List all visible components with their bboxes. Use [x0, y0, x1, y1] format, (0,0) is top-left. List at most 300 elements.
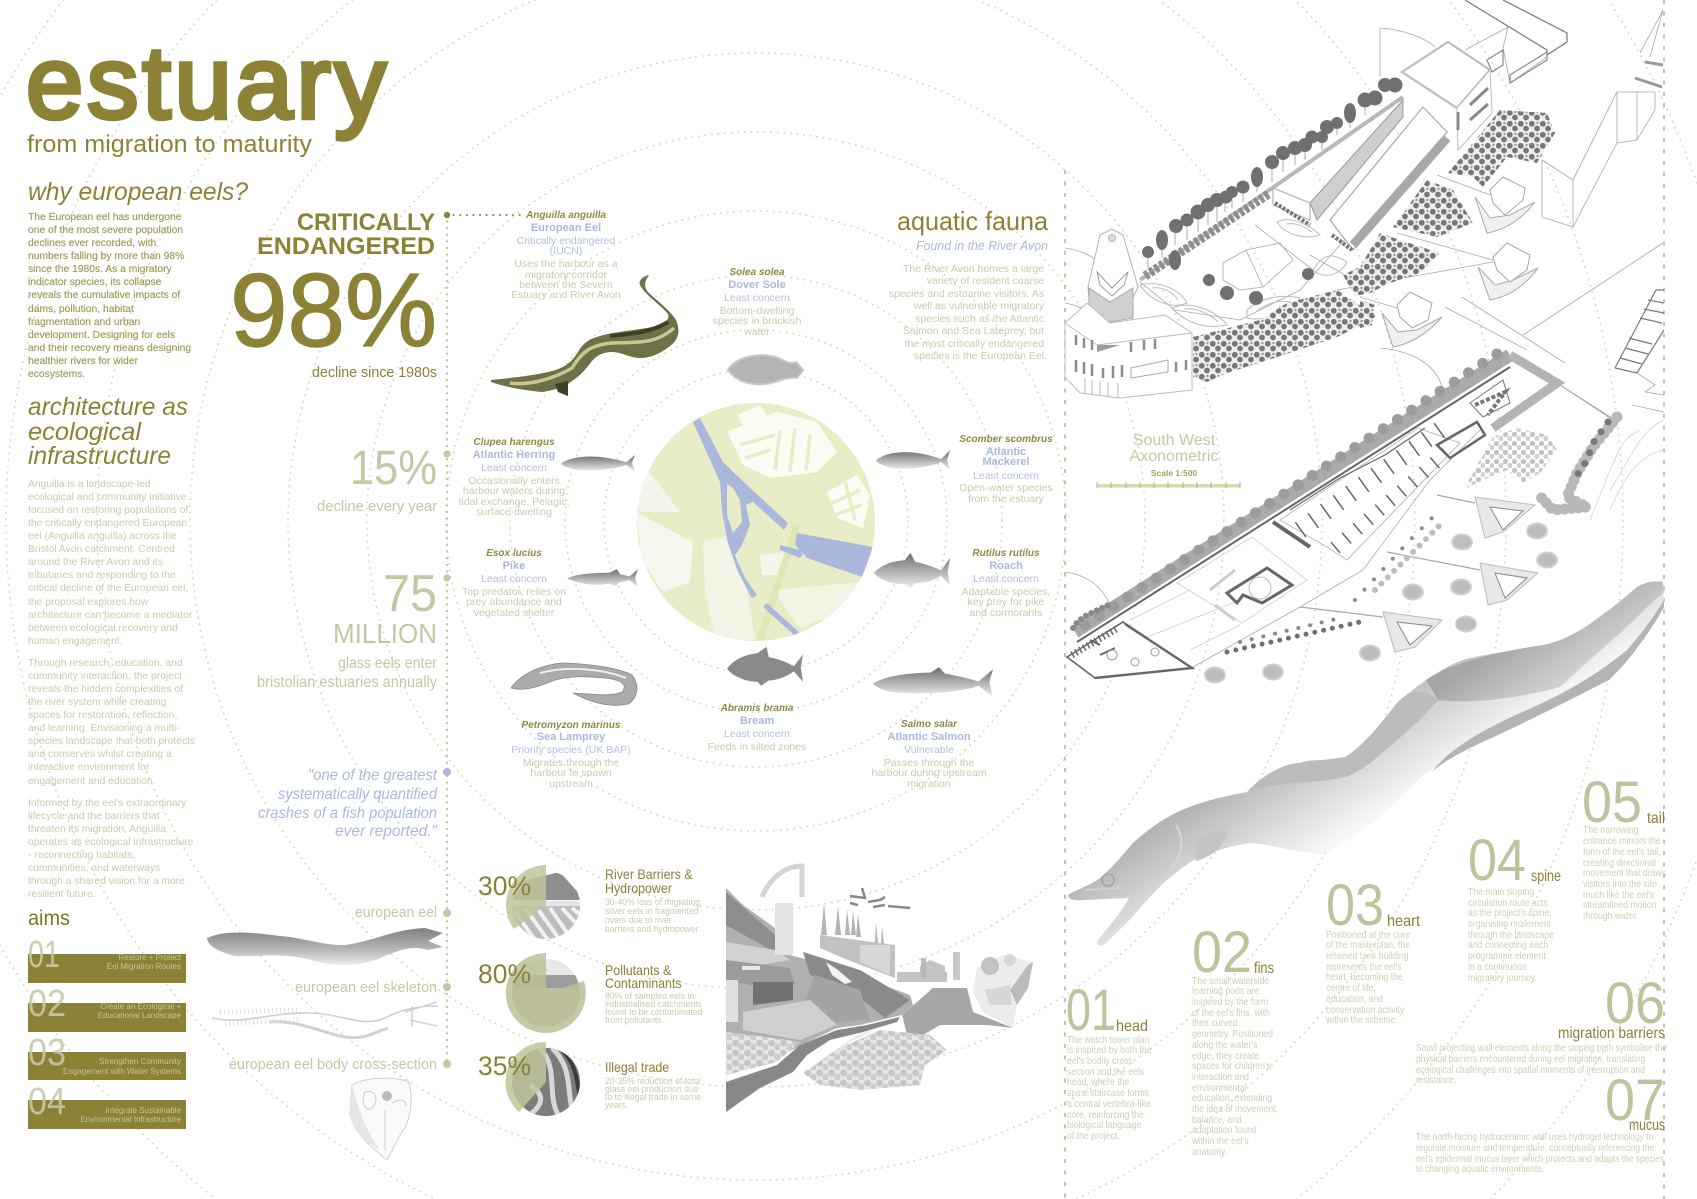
heading: architecture as ecological infrastructure: infrastructure [28, 442, 171, 470]
aim bar 01: Eel Migration Routes [107, 962, 181, 971]
panel: aquatic fauna heading: aquatic fauna [897, 206, 1049, 236]
illustration: sea lamprey [511, 663, 637, 705]
text: why european eels: declines ever recorded, with [28, 238, 156, 249]
annotation 01 head: The watch tower plan [1067, 1034, 1150, 1045]
timeline dots [443, 212, 451, 1068]
text: architecture description: operates as ecological infrastructure [28, 837, 194, 848]
label: european eel skeleton: european eel skeleton [295, 979, 437, 996]
threat: illegal trade [478, 1042, 701, 1118]
annotation 05 tail: 05 [1582, 770, 1642, 835]
annotation 07 mucus: mucus [1629, 1117, 1665, 1134]
yard at spine end [1470, 355, 1557, 428]
text: dover sole: Dover Sole [728, 279, 786, 291]
text: roach: Rutilus rutilus [972, 548, 1040, 559]
panel: aquatic fauna heading: species and estuarine visitors. As [889, 288, 1044, 300]
text: why european eels: The European eel has undergone [28, 212, 182, 223]
threat: river barriers [478, 865, 700, 940]
text: dover sole: Bottom-dwelling [720, 305, 795, 317]
annotation 04 spine: migratory journey. [1468, 972, 1537, 983]
annotation 05 tail: much like the eel's [1583, 889, 1654, 900]
species: dover sole [713, 267, 803, 384]
text: pollutants [605, 963, 702, 1025]
text: sea lamprey: Migrates through the [523, 757, 619, 769]
pie 35% [478, 1042, 585, 1118]
aim bar 04: 04 [28, 1081, 66, 1123]
subtitle: from migration to maturity [27, 131, 312, 158]
stat: 15%: 15% [350, 442, 437, 495]
aim bar 04 [28, 1081, 186, 1129]
text: why european eels: reveals the cumulative impacts of [28, 290, 180, 301]
text: architecture description: threaten its migration, Anguilla [28, 824, 166, 835]
steps [1615, 290, 1664, 412]
aim bar 01 [28, 934, 186, 983]
panel: aquatic fauna heading [889, 206, 1049, 362]
text: architecture description: Through research, education, and [28, 658, 183, 669]
stat: 75 million: glass eels enter [338, 655, 438, 672]
text: architecture description: resilient future. [28, 889, 96, 900]
annotation 03 heart: heart [1387, 913, 1421, 930]
annotation 05 tail: creating directional [1583, 857, 1656, 868]
annotation 02 fins [1191, 920, 1278, 1157]
text: salmon: harbour during upstream [872, 767, 987, 779]
text: roach: and cormorants [970, 607, 1042, 619]
text: herring: tidal exchange. Pelagic, [459, 496, 569, 508]
text: architecture description: Anguilla is a landscape-led [28, 479, 151, 490]
text: river barriers: 30-40% loss of migrating [605, 897, 700, 907]
scale bar [1097, 482, 1240, 488]
text: illegal trade: years. [605, 1100, 629, 1110]
text: european eel: Estuary and River Avon [511, 289, 621, 301]
text: pike: Pike [503, 560, 525, 572]
text: pollutants: Pollutants & [605, 963, 672, 978]
annotation 03 heart: 03 [1326, 873, 1384, 938]
text: european eel: Critically endangered [517, 235, 615, 247]
text: river barriers: silver eels in fragmented [605, 906, 699, 916]
text: architecture description: species landscape that both protects [28, 736, 195, 747]
text: sea lamprey: harbour to spawn [530, 767, 612, 779]
annotation 03 heart: of the masterplan, the [1326, 939, 1410, 950]
text: why european eels: indicator species, its collapse [28, 277, 162, 288]
text: european eel: Anguilla anguilla [525, 210, 606, 221]
quote: "one of the greatest [308, 767, 438, 784]
text: architecture description: engagement and education. [28, 776, 156, 787]
text: pollutants: from pollutants. [605, 1015, 664, 1025]
text: illegal trade [605, 1060, 701, 1110]
text: river barriers: River Barriers & [605, 867, 693, 882]
caption: south west axonometric [1097, 432, 1240, 488]
text: mackerel: Mackerel [982, 456, 1030, 468]
tower base building [1065, 303, 1192, 398]
text: roach [962, 548, 1050, 619]
drawing: european eel [207, 928, 443, 965]
aim bar 04: Integrate Sustainable [105, 1106, 182, 1115]
caption: south west axonometric: Scale 1:500 [1151, 468, 1197, 478]
annotation 02 fins: their curved [1192, 1017, 1237, 1028]
text: why european eels: ecosystems. [28, 369, 85, 380]
text: architecture description: critical decline of the European eel, [28, 583, 188, 594]
text: herring: Atlantic Herring [473, 449, 555, 461]
panel: aquatic fauna heading: Found in the River Avon [916, 238, 1048, 253]
annotation 04 spine: programme element [1468, 950, 1546, 961]
annotation 01 head: is inspired by both the [1067, 1044, 1152, 1055]
annotation 05 tail: tail [1647, 810, 1665, 827]
annotation 05 tail: movement that draws [1583, 867, 1666, 878]
planting circles [1205, 524, 1557, 682]
annotation 02 fins: adaptation found [1192, 1124, 1257, 1135]
stat: critically endangered [230, 209, 437, 381]
text: european eel: between the Severn [519, 279, 613, 291]
text: architecture description: focused on restoring populations of [28, 505, 188, 516]
text: why european eels: since the 1980s. As a migratory [28, 264, 173, 275]
text: salmon: Salmo salar [901, 719, 958, 730]
text: mackerel: Atlantic [986, 446, 1026, 458]
species: european eel [491, 210, 678, 396]
text: pike [462, 548, 566, 619]
annotation 01 head: 01 [1066, 978, 1116, 1043]
text: illegal trade: glass eel production due [605, 1084, 699, 1094]
annotation 03 heart: within the scheme. [1325, 1014, 1398, 1025]
annotation 03 heart: conservation activity [1326, 1004, 1405, 1015]
annotation 02 fins: 02 [1192, 920, 1252, 985]
text: why european eels: dams, pollution, habitat [28, 304, 134, 315]
quote: crashes of a fish population [258, 805, 437, 822]
text: architecture description: community interaction, the project [28, 671, 182, 682]
text: illegal trade: 20-35% reduction of total [605, 1076, 701, 1086]
annotation 04 spine: spine [1531, 868, 1561, 885]
stat: 75 million: MILLION [333, 618, 437, 649]
annotation 02 fins: within the eel's [1191, 1135, 1249, 1146]
text: salmon: migration [907, 778, 951, 790]
aim bar 04: Environmental Infrastructure [80, 1115, 182, 1124]
text: european eel: migratory corridor [525, 269, 608, 281]
text: sea lamprey [511, 720, 631, 790]
stat: critically endangered: ENDANGERED [257, 233, 435, 260]
annotation 02 fins: the idea of movement, [1192, 1103, 1278, 1114]
tree masses [1193, 110, 1555, 382]
annotation 04 spine: as the project's spine, [1468, 907, 1552, 918]
text: architecture description: between ecological recovery and [28, 623, 178, 634]
dotted vertical guides [447, 0, 1664, 1199]
drawing: eel skeleton [212, 1002, 438, 1038]
text: architecture description: - reconnecting habitats, [28, 850, 135, 861]
text: pike: Top predator, relies on [462, 586, 566, 598]
text: why european eels: development. Designing for eels [28, 330, 175, 341]
stat: critically endangered: CRITICALLY [297, 209, 435, 236]
annotation 06 migration barriers: Small projecting wall elements along the sloping path symbolise the [1416, 1042, 1667, 1053]
text: sea lamprey: upstream [549, 778, 593, 790]
text: why european eels: healthier rivers for wider [28, 356, 138, 367]
text: architecture description: and learning. Envisioning a multi- [28, 723, 180, 734]
aim bar 01: 01 [28, 934, 60, 976]
text: mackerel: from the estuary [968, 493, 1045, 505]
stat: 75 million: bristolian estuaries annually [257, 674, 437, 691]
annotation 04 spine: The main sloping [1468, 886, 1534, 897]
panel: threats [478, 865, 702, 1118]
title: estuary [26, 25, 386, 140]
text: bream: Abramis brama [720, 703, 794, 714]
text: herring: surface-dwelling [476, 506, 552, 518]
text: why european eels: fragmentation and urban [28, 317, 140, 328]
text: salmon: Vulnerable [904, 744, 954, 756]
species: pike [462, 548, 638, 619]
quote [258, 767, 438, 840]
pie 80% [478, 953, 586, 1033]
text: roach: key prey for pike [967, 596, 1045, 608]
text: river barriers [605, 867, 700, 934]
annotation 02 fins: spaces for children's [1192, 1060, 1271, 1071]
text: roach: Adaptable species, [962, 586, 1050, 598]
text: why european eels: numbers falling by more than 98% [28, 251, 184, 262]
panel: aquatic fauna heading: species is the European Eel. [914, 350, 1047, 362]
caption: south west axonometric: South West [1133, 432, 1216, 449]
text: architecture description: and conserves whilst creating a [28, 749, 172, 760]
species: atlantic herring [459, 437, 635, 518]
aim bar 03: 03 [28, 1032, 66, 1074]
collage: harbour landscape [726, 866, 1033, 1112]
annotation 02 fins: fins [1254, 960, 1274, 977]
text: european eel: European Eel [531, 222, 601, 234]
illustration: pike [567, 569, 638, 587]
species: bream [708, 647, 806, 753]
stat: 15% [317, 442, 437, 515]
text: mackerel: Scomber scombrus [959, 434, 1053, 445]
aim bar 01: Restore + Protect [119, 953, 182, 962]
text: why european eels: and their recovery means designing [28, 343, 191, 354]
annotation 01 head: biological language [1067, 1119, 1141, 1130]
text: architecture description: ecological and community initiative [28, 492, 187, 503]
aim bar 03: Strengthen Community [99, 1057, 181, 1066]
upper-right deck [1465, 0, 1663, 87]
text: architecture description: spaces for restoration, reflection, [28, 710, 177, 721]
annotation 05 tail: visitors into the site [1583, 878, 1657, 889]
text: pollutants: 80% of sampled eels in [605, 991, 694, 1001]
annotation 05 tail: form of the eel's tail, [1583, 846, 1660, 857]
annotation 03 heart: represents the eel's [1326, 961, 1402, 972]
aim bar 03: Engagement with Water Systems [63, 1067, 181, 1076]
threat: pollutants [478, 953, 702, 1033]
illustration: mackerel [876, 450, 950, 470]
text: pollutants: found to be contaminated [605, 1007, 702, 1017]
fan pods [1383, 497, 1538, 652]
text: sea lamprey: Priority species (UK BAP) [511, 744, 631, 756]
pods with stepped fans [1382, 177, 1538, 347]
heading: why european eels: why european eels? [28, 178, 248, 206]
text: architecture description: eel (Anguilla anguilla) across the [28, 531, 177, 542]
spine wall [1075, 355, 1510, 632]
text: herring: Clupea harengus [473, 437, 555, 448]
stat: 75 million: 75 [383, 565, 437, 623]
text: architecture description: tributaries and responding to the [28, 570, 176, 581]
annotation 03 heart: heart, becoming the [1326, 971, 1403, 982]
text: architecture description: the river system while creating [28, 697, 167, 708]
annotation 02 fins: education, extending [1192, 1092, 1272, 1103]
annotation 06 migration barriers: resistance. [1416, 1074, 1457, 1085]
text: architecture description: reveals the hidden complexities of [28, 684, 183, 695]
stat: 15%: decline every year [317, 498, 437, 515]
text: architecture description: the critically endangered European [28, 518, 187, 529]
annotation 02 fins: geometry. Positioned [1192, 1028, 1273, 1039]
shrub masses [1227, 417, 1617, 652]
annotation 06 migration barriers: migration barriers [1558, 1025, 1665, 1042]
text: mackerel: Least concern [973, 470, 1039, 482]
annotation 03 heart: Positioned at the core [1326, 929, 1410, 940]
label: european eel: european eel [355, 904, 437, 921]
heading: aims: aims [28, 907, 70, 930]
annotation 01 head: head [1116, 1018, 1148, 1035]
illustration: european eel [491, 275, 678, 396]
annotation 06 migration barriers: 06 [1605, 971, 1665, 1036]
axonometric: lower site plan [1067, 352, 1664, 682]
text: dover sole: Least concern [724, 292, 790, 304]
annotation 05 tail [1582, 770, 1666, 921]
panel: aquatic fauna heading: well as vulnerable migratory [913, 300, 1045, 312]
aim bar 02: 02 [28, 983, 66, 1025]
annotation 02 fins: interaction and [1192, 1071, 1249, 1082]
annotation 04 spine: through the landscape [1468, 929, 1554, 940]
annotation 06 migration barriers: physical barriers encountered during eel migration, translating [1416, 1053, 1645, 1064]
top building [1402, 42, 1492, 150]
annotation 02 fins: edge, they create [1192, 1050, 1259, 1061]
text: architecture description: Informed by the eel's extraordinary [28, 798, 187, 809]
annotation 03 heart: retained tank building [1326, 950, 1409, 961]
text: dover sole: species in brackish [713, 315, 802, 327]
text: pike: Esox lucius [486, 548, 542, 559]
text: pollutants: industrialised catchments [605, 999, 702, 1009]
heading: architecture as ecological infrastructure: architecture as [28, 393, 188, 421]
annotation 01 head: core, reinforcing the [1067, 1109, 1144, 1120]
text: architecture description: communities, and waterways [28, 863, 160, 874]
annotation 05 tail: entrance mirrors the [1583, 835, 1661, 846]
annotation 04 spine: and connecting each [1468, 939, 1548, 950]
annotation 01 head: section and the eels [1067, 1066, 1145, 1077]
text: pike: Least concern [481, 573, 547, 585]
panel: aquatic fauna heading: the most critically endangered [905, 338, 1044, 350]
text: pike: vegetated shelter [474, 607, 555, 619]
tree row on spine [1085, 352, 1500, 625]
text: european eel: (IUCN) [550, 245, 582, 257]
stat: critically endangered: decline since 1980s [312, 364, 437, 381]
illustration: dover sole [728, 355, 803, 384]
text: bream: Least concern [724, 728, 790, 740]
annotation 02 fins: inspired by the form [1192, 996, 1268, 1007]
text: sea lamprey: Petromyzon marinus [522, 720, 621, 731]
text: herring: harbour waters during [463, 485, 565, 497]
wall and barns [1140, 97, 1447, 280]
annotation 01 head: a central vertebra-like [1067, 1098, 1151, 1109]
stat: 75 million [257, 565, 438, 691]
text: illegal trade: to to illegal trade in some [605, 1092, 701, 1102]
illustration: herring [561, 455, 635, 471]
pie 35%: 35% [478, 1051, 531, 1081]
text: herring [459, 437, 569, 518]
species: roach [874, 548, 1050, 619]
annotation 01 head [1066, 978, 1152, 1141]
text: dover sole: water [743, 326, 770, 338]
annotation 07 mucus: regulate moisture and temperature, conceptually referencing the [1416, 1142, 1654, 1153]
annotation 06 migration barriers [1416, 971, 1667, 1085]
text: pollutants: Contaminants [605, 976, 682, 991]
text: river barriers: Hydropower [605, 881, 673, 896]
species: atlantic salmon [872, 667, 993, 790]
text: why european eels: one of the most severe population [28, 225, 183, 236]
text: river barriers: barriers and hydropower. [605, 924, 700, 934]
text: european eel: Uses the harbour as a [514, 258, 618, 270]
annotation 02 fins: anatomy. [1192, 1146, 1227, 1157]
text: river barriers: rivers due to river [605, 915, 672, 925]
text: bream [708, 703, 806, 753]
annotation 05 tail: streamlined motion [1583, 899, 1656, 910]
annotation 01 head: head, where the [1067, 1076, 1129, 1087]
text: architecture description: lifecycle and the barriers that [28, 811, 160, 822]
text: architecture description: through a shared vision for a more [28, 876, 185, 887]
panel: aquatic fauna heading: variety of resident coarse [927, 275, 1044, 287]
species: atlantic mackerel [876, 434, 1053, 505]
text: salmon: Atlantic Salmon [887, 731, 971, 743]
quote: ever reported." [335, 823, 438, 840]
text: dover sole [713, 267, 802, 338]
text: sea lamprey: Sea Lamprey [537, 731, 606, 743]
drawing: cross-section [350, 1078, 411, 1160]
annotation 02 fins: of the eel's fins, with [1192, 1007, 1270, 1018]
annotation 02 fins: balance, and [1192, 1114, 1242, 1125]
text: architecture description: architecture can become a mediator [28, 610, 193, 621]
text: herring: Occasionally enters [468, 475, 560, 487]
aim bar 02 [28, 983, 186, 1032]
text: herring: Least concern [481, 462, 547, 474]
contour gardens [1140, 220, 1347, 326]
annotation 07 mucus: eel's epidermal mucus layer which protects and adapts the species [1416, 1153, 1665, 1164]
text: european eel [511, 210, 621, 301]
annotation 07 mucus [1416, 1068, 1665, 1174]
annotation 03 heart: education, and [1326, 993, 1383, 1004]
axonometric: upper buildings [1065, 0, 1664, 610]
front triangle [1067, 603, 1192, 678]
stat: critically endangered: 98% [230, 253, 437, 369]
aim bar 02: Create an Ecological + [100, 1002, 181, 1011]
text: architecture description: human engagement. [28, 636, 122, 647]
annotation 07 mucus: to changing aquatic environments. [1416, 1163, 1544, 1174]
site lines [1065, 10, 1663, 610]
text: mackerel [959, 434, 1053, 505]
annotation 05 tail: through water. [1583, 910, 1638, 921]
annotation 04 spine: circulation route acts [1468, 897, 1548, 908]
pie 80%: 80% [478, 959, 531, 989]
text: salmon [872, 719, 987, 790]
annotation 02 fins: environmental [1192, 1082, 1247, 1093]
text: pike: prey abundance and [466, 596, 562, 608]
annotation 04 spine: organising movement [1468, 918, 1551, 929]
annotation 01 head: eel's bodily cross [1067, 1055, 1133, 1066]
text: illegal trade: Illegal trade [605, 1060, 669, 1075]
aim bar 02: Educational Landscape [98, 1011, 182, 1020]
caption: south west axonometric: Axonometric [1130, 448, 1218, 465]
annotation 04 spine: in a continuous [1468, 961, 1527, 972]
illustration: large eel [1068, 581, 1664, 945]
heading: architecture as ecological infrastructure: ecological [28, 418, 142, 446]
annotation 07 mucus: The north-facing hydroceramic wall uses hydrogel technology to [1416, 1131, 1653, 1142]
annotation 01 head: spiral staircase forms [1067, 1087, 1149, 1098]
site outline [1130, 383, 1664, 667]
central plan [1210, 568, 1292, 620]
tree row along wall [1142, 78, 1402, 305]
label: body cross-section: european eel body cross-section [229, 1056, 437, 1073]
text: architecture description: the proposal explores how [28, 597, 149, 608]
panel: aquatic fauna heading: species such as the Atlantic [915, 313, 1044, 325]
text: roach: Least concern [973, 573, 1039, 585]
annotation 02 fins: learning pods are [1192, 985, 1259, 996]
quote: systematically quantified [278, 786, 438, 803]
learning spaces block [1273, 422, 1485, 560]
